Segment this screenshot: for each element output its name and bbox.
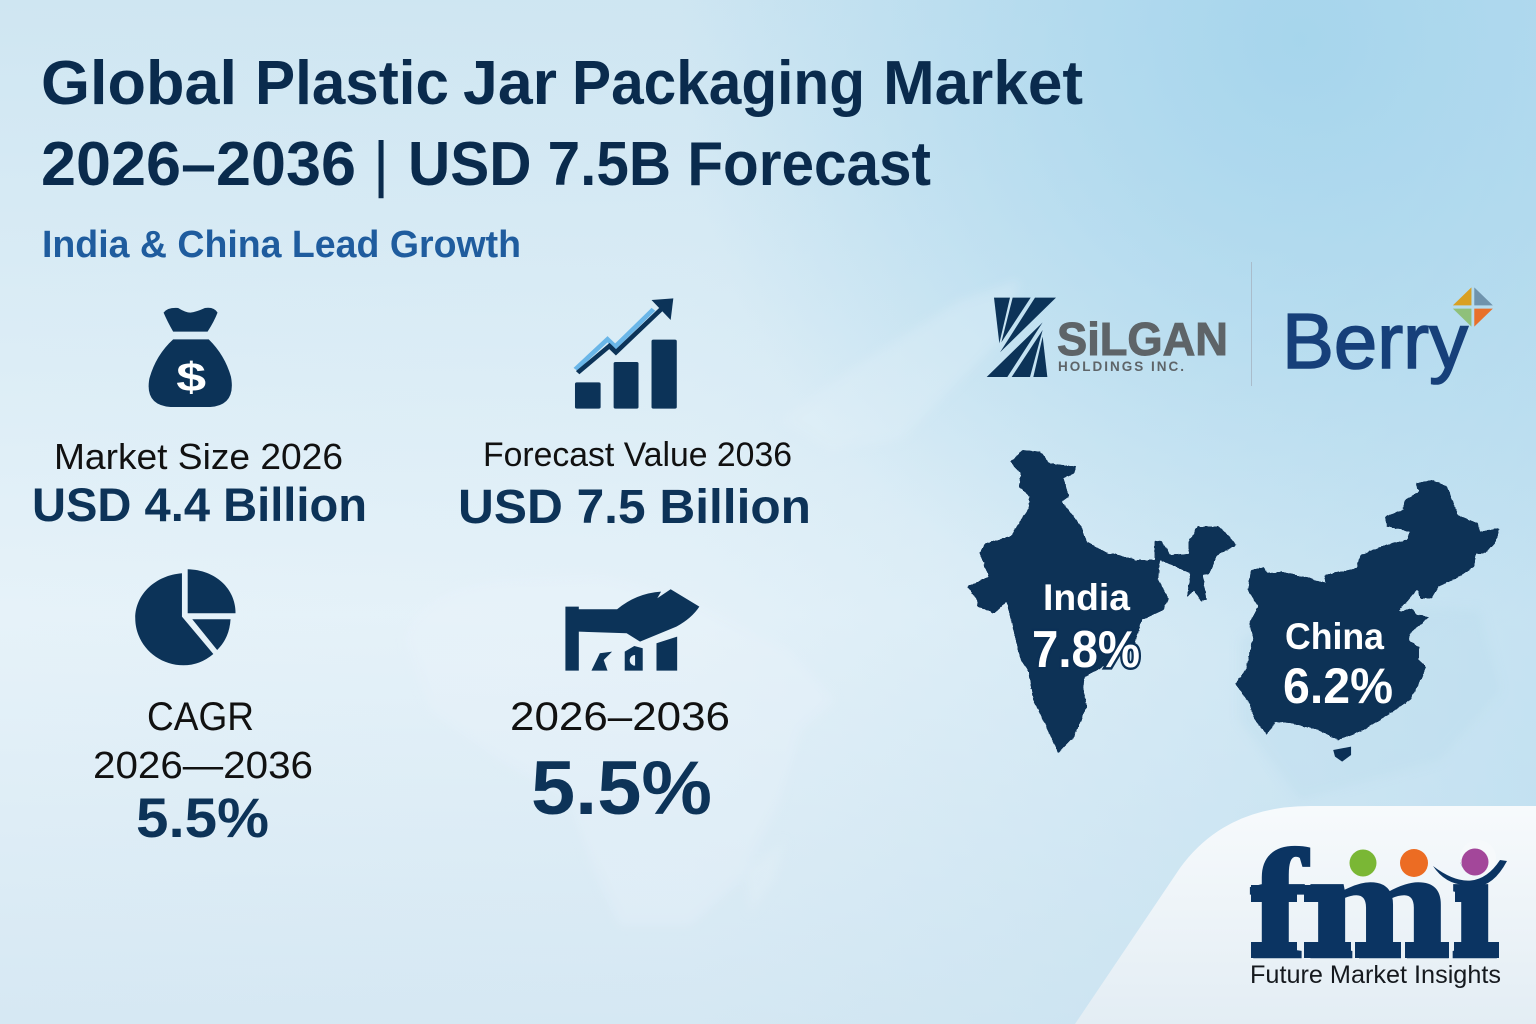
- India value: 7.8%: [1032, 621, 1140, 679]
- value: USD 4.4 Billion: [32, 478, 367, 531]
- icon: orange dot: [1400, 849, 1428, 877]
- wordmark: SiLGAN: [1057, 313, 1228, 365]
- panel: FMI logo card: [1075, 806, 1536, 1024]
- icon: money bag: $: [176, 355, 206, 400]
- icon: pie chart: [135, 569, 236, 665]
- label: Forecast Value 2036: [483, 436, 792, 474]
- map: India: [967, 450, 1237, 753]
- China shape: [1235, 480, 1499, 740]
- value: 5.5%: [136, 786, 269, 849]
- title: Jar: [463, 49, 557, 118]
- title: Packaging: [572, 49, 865, 118]
- divider: [1251, 262, 1252, 386]
- label: Market Size 2026: [54, 436, 343, 477]
- icon: green dot: [1350, 850, 1376, 876]
- China label: China: [1285, 616, 1384, 657]
- mask over wordmark dot: [1460, 840, 1496, 876]
- icon: hand over bars: [565, 589, 699, 671]
- Hainan island: [1333, 747, 1351, 762]
- label: CAGR: [147, 695, 254, 739]
- icon: four colour diamond: [1453, 287, 1493, 327]
- metric: forecast value 2036: [458, 298, 811, 534]
- logo: Berry: [1282, 287, 1493, 385]
- metric: CAGR: [93, 569, 313, 849]
- title: 2026–2036: [41, 130, 356, 199]
- wordmark: Berry: [1282, 297, 1468, 385]
- title: USD 7.5B Forecast: [408, 130, 931, 199]
- map: China: [1235, 480, 1499, 762]
- title: Plastic: [255, 49, 449, 118]
- icon: rising bar chart: [575, 298, 677, 409]
- title: Market: [883, 49, 1083, 118]
- subtitle: India & China Lead Growth: [42, 224, 521, 266]
- title: |: [373, 130, 389, 199]
- period: 2026–2036: [510, 695, 730, 739]
- metric: market size 2026: [32, 308, 367, 531]
- period: 2026—2036: [93, 745, 313, 787]
- caption: Future Market Insights: [1250, 961, 1501, 989]
- metric: period growth: [510, 589, 730, 831]
- tagline: HOLDINGS INC.: [1058, 359, 1184, 374]
- India label: India: [1043, 577, 1130, 618]
- title: Global: [41, 49, 237, 118]
- logo: Silgan Holdings: [987, 298, 1228, 377]
- value: 5.5%: [531, 746, 712, 831]
- icon: purple figure: [1433, 848, 1507, 887]
- India shape: [967, 450, 1237, 753]
- icon: money bag: [149, 308, 232, 407]
- icon: Silgan mark: [987, 298, 1056, 377]
- logo: fmi wordmark: fmi: [1250, 818, 1498, 991]
- title: [41, 49, 1083, 199]
- background world map: [939, 288, 1012, 356]
- China value: 6.2%: [1283, 658, 1393, 714]
- value: USD 7.5 Billion: [458, 481, 811, 534]
